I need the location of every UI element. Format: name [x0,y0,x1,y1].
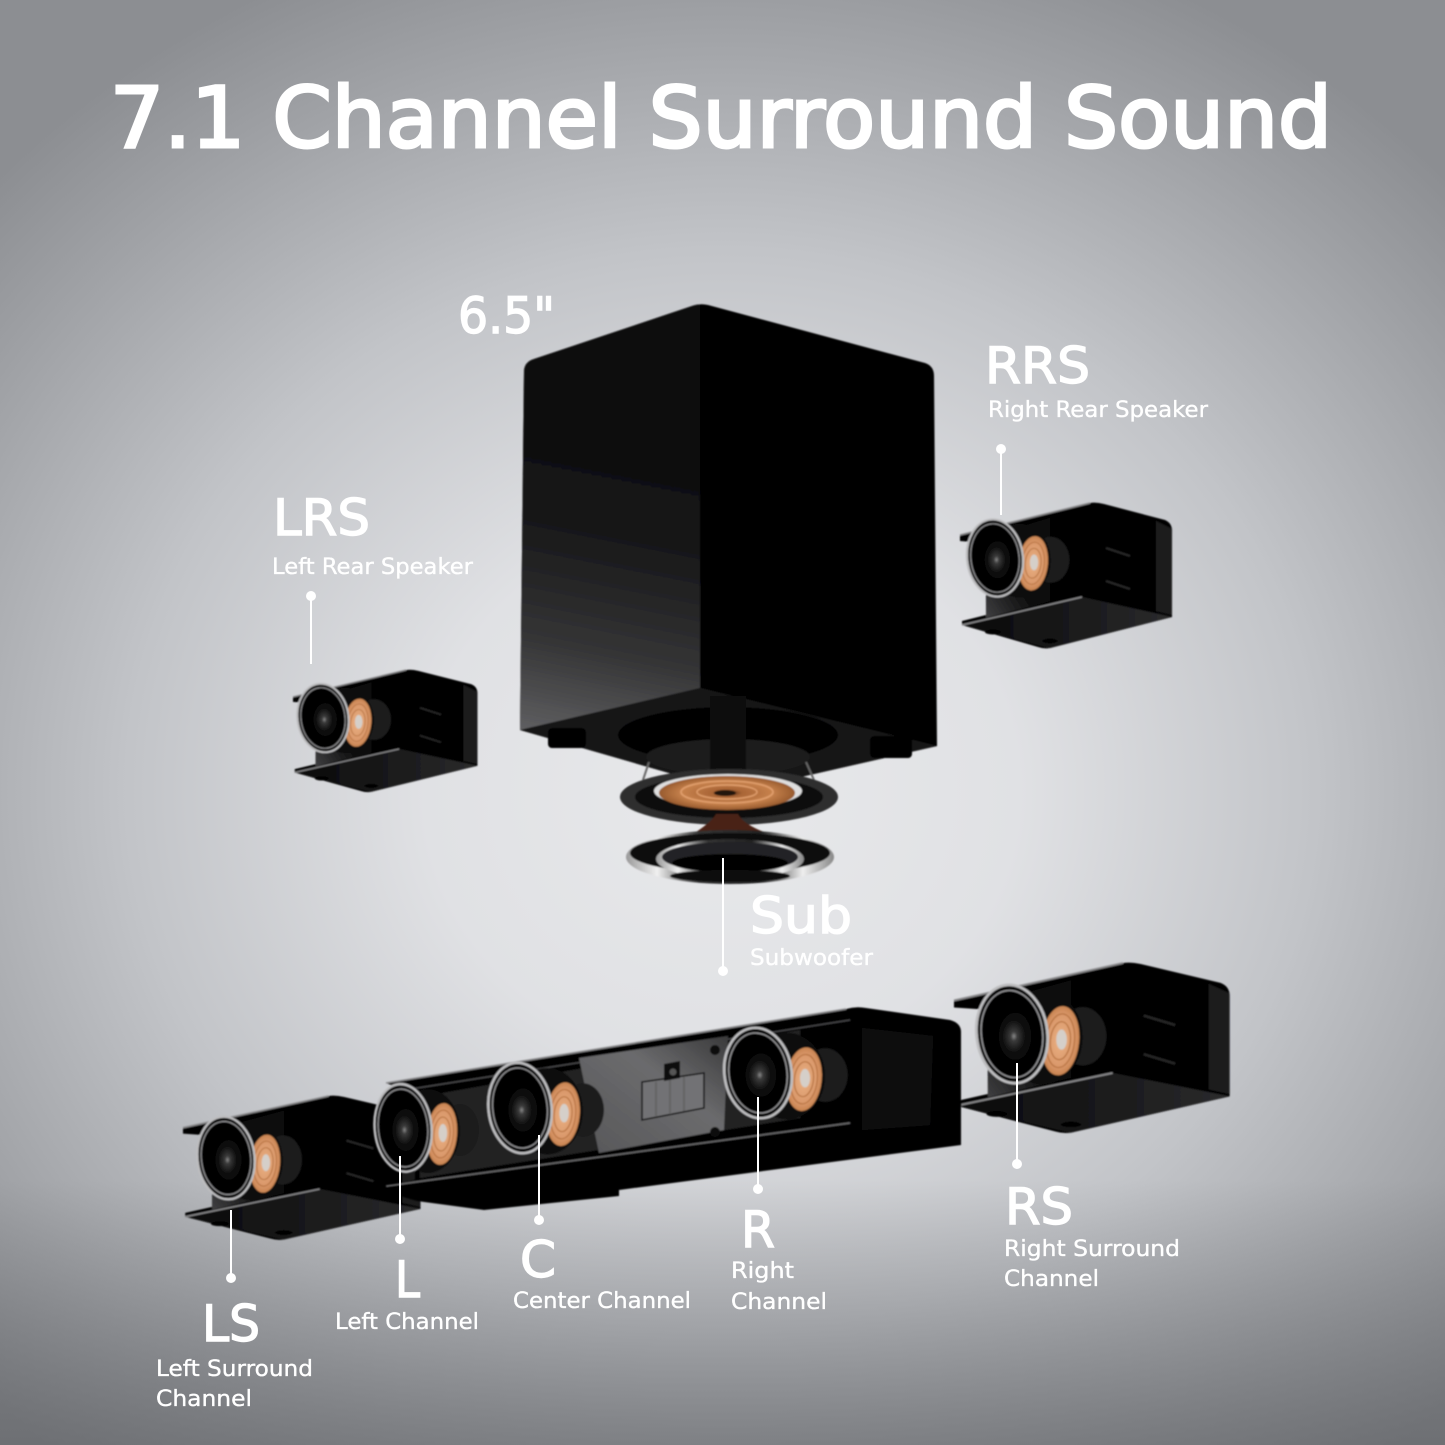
leader: RRS [996,444,1006,515]
LRS housing [293,670,477,792]
label: RS [1004,1178,1180,1292]
label: R: Channel [731,1290,827,1315]
soundbar [370,1007,961,1210]
label: R: Right [731,1259,794,1284]
RS housing [954,963,1230,1133]
subwoofer driver: copper coil ring [620,769,838,825]
label: Sub: Subwoofer [750,946,874,971]
soundbar terminal plate [642,1045,720,1137]
right rear speaker [960,503,1172,648]
soundbar center panel [420,1030,800,1178]
label: Sub: Sub [750,887,852,945]
label: LRS: LRS [273,489,370,547]
soundbar housing [386,1007,961,1210]
label: RRS: Right Rear Speaker [988,398,1209,423]
leader: L [395,1156,405,1244]
leader: LRS [306,591,316,664]
C driver [484,1060,604,1156]
soundbar end panel [862,1028,933,1130]
title: 7.1 Channel Surround Sound [110,69,1332,167]
leader: C [534,1135,544,1225]
label: LS [156,1295,313,1412]
leader: R [753,1097,763,1194]
LS housing [183,1096,420,1240]
label: LS: LS [202,1295,260,1353]
leader: RS [1012,1063,1022,1169]
RRS driver [963,517,1069,599]
label: 6.5 inch: 6.5" [458,287,555,345]
LS driver [193,1114,302,1202]
leader: LS [226,1210,236,1283]
RRS housing [960,503,1172,648]
right surround speaker [954,963,1230,1133]
subwoofer driver: lower cone and surround [626,814,834,884]
LRS driver [294,681,391,755]
left rear speaker [293,670,477,792]
leader: Sub [718,858,728,976]
label: RS: RS [1005,1178,1073,1236]
label: RRS: RRS [985,337,1090,395]
label: LRS: Left Rear Speaker [272,555,474,580]
RS driver [971,981,1106,1087]
label: LS: Left Surround [156,1357,313,1382]
label: R [731,1201,827,1315]
label: LRS [272,489,474,580]
label: C [513,1231,691,1314]
label: Sub [750,887,874,971]
label: C: C [520,1231,556,1289]
label: RRS [985,337,1209,423]
label: R: R [741,1201,775,1259]
subwoofer [520,304,937,884]
label: L: Left Channel [335,1310,479,1335]
label: LS: Channel [156,1387,252,1412]
label: C: Center Channel [513,1289,691,1314]
R driver [719,1025,848,1121]
label: L [335,1251,479,1335]
label: RS: Channel [1004,1267,1099,1292]
label: RS: Right Surround [1004,1237,1180,1262]
left surround speaker [183,1096,420,1240]
L driver [370,1081,479,1175]
subwoofer driver: upper basket [618,696,838,780]
label: L: L [395,1251,420,1309]
subwoofer cabinet [520,304,937,792]
